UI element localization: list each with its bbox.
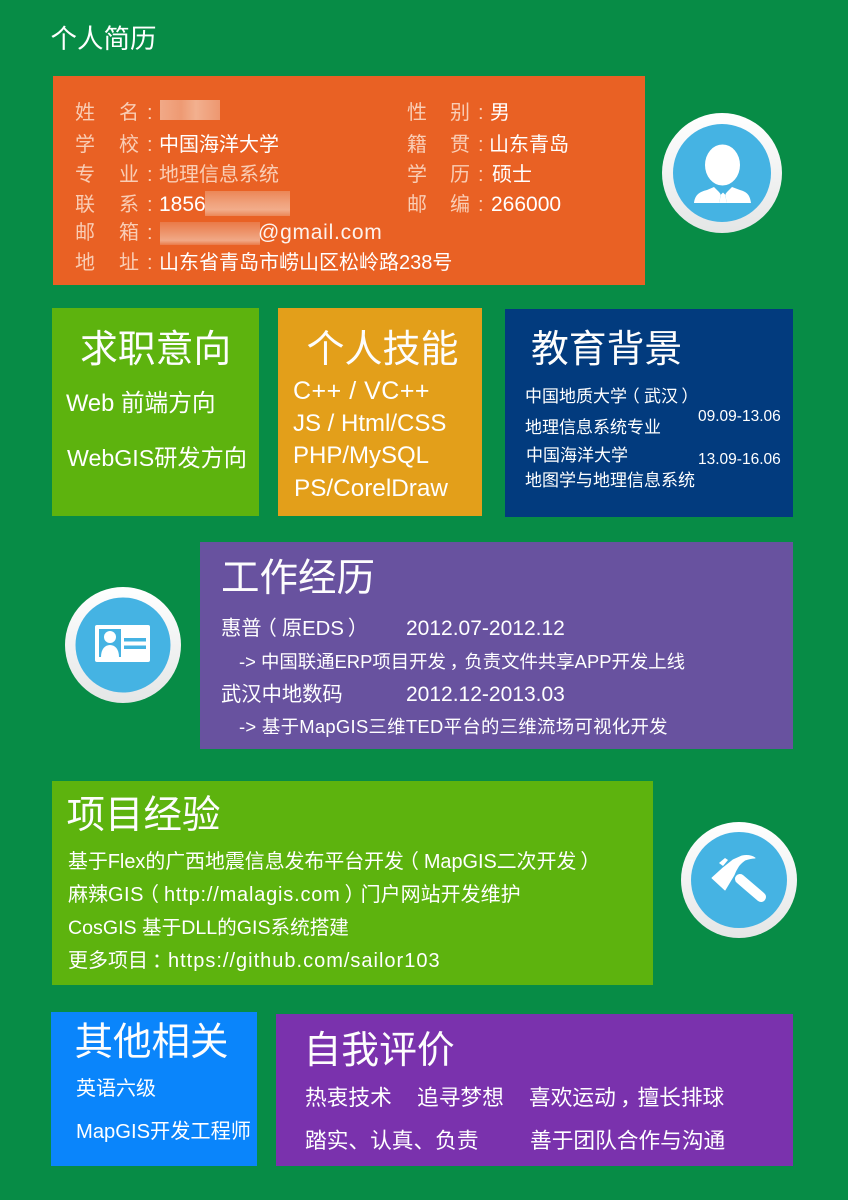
panel: skills <box>278 308 482 516</box>
text: second job detail: -> 基于MapGIS三维TED平台的三维流场可视化开发 <box>239 716 668 737</box>
panel: self assessment <box>276 1014 793 1166</box>
row: name and gender <box>75 100 510 124</box>
row: address: 地 <box>75 252 95 274</box>
text: project two: 麻辣GIS（http://malagis.com）门户网站开发维护 <box>68 884 521 906</box>
row: school and hometown: : <box>478 134 484 156</box>
row: school and hometown: 山东青岛 <box>489 134 569 156</box>
text: first job detail: -> 中国联通ERP项目开发，负责文件共享APP开发上线 <box>239 651 685 672</box>
row: name and gender: 名 <box>119 102 139 124</box>
text: second major: 地图学与地理信息系统 <box>525 471 695 490</box>
text: passion for technology: 热衷技术 <box>305 1085 392 1110</box>
row: name and gender: 姓 <box>75 102 95 124</box>
heading: 教育背景 <box>531 329 682 371</box>
text: C++: C++ / VC++ <box>293 377 430 405</box>
text: second dates: 13.09-16.06 <box>698 451 781 468</box>
row: major and degree <box>75 164 532 186</box>
row: school and hometown <box>75 134 569 156</box>
row: school and hometown: 校 <box>119 134 139 156</box>
text: second university: 中国海洋大学 <box>526 446 628 465</box>
icon: person badge <box>662 113 782 233</box>
row: school and hometown: 中国海洋大学 <box>159 134 279 156</box>
row: email: @gmail.com <box>258 221 383 244</box>
row: email: 邮 <box>75 222 95 244</box>
text: first period: 2012.07-2012.12 <box>406 617 565 640</box>
title: 个人简历 <box>50 24 156 54</box>
row: name and gender: : <box>147 102 153 124</box>
row: major and degree: 专 <box>75 164 95 186</box>
text: second employer: 武汉中地数码 <box>221 684 343 706</box>
row: phone and postcode: 系 <box>119 194 139 216</box>
text: PHP MySQL: PHP/MySQL <box>293 442 429 469</box>
heading: 其他相关 <box>74 1021 229 1064</box>
row: major and degree: : <box>147 164 153 186</box>
text: project link: 更多项目：https://github.com/sailor103 <box>68 950 441 972</box>
row: major and degree: 学 <box>407 164 427 186</box>
row: phone and postcode: 266000 <box>491 193 561 216</box>
heading: 项目经验 <box>66 794 221 837</box>
heading: 自我评价 <box>304 1030 455 1072</box>
panel: basic information <box>53 76 645 285</box>
text: first employer: 惠普（原EDS） <box>221 618 368 640</box>
row: phone and postcode: 邮 <box>407 194 427 216</box>
row: major and degree: : <box>478 164 484 186</box>
row: address: : <box>147 252 153 274</box>
row: major and degree: 业 <box>119 164 139 186</box>
row: major and degree: 地理信息系统 <box>159 164 279 186</box>
text: WebGIS direction: WebGIS研发方向 <box>67 445 247 471</box>
row: major and degree: 历 <box>450 164 470 186</box>
row: phone and postcode: 编 <box>450 194 470 216</box>
text: PS CorelDraw: PS/CorelDraw <box>294 475 448 502</box>
text: project one: 基于Flex的广西地震信息发布平台开发（MapGIS二次开发） <box>68 851 600 873</box>
text: english level: 英语六级 <box>76 1078 156 1100</box>
row: school and hometown: : <box>147 134 153 156</box>
row: name and gender: 别 <box>450 102 470 124</box>
heading: 工作经历 <box>221 557 375 600</box>
row: school and hometown: 贯 <box>450 134 470 156</box>
text: pursuing dreams: 追寻梦想 <box>417 1085 504 1110</box>
heading: 个人技能 <box>306 329 459 371</box>
icon: id card badge <box>65 587 181 703</box>
row: phone and postcode: 联 <box>75 194 95 216</box>
row: phone and postcode: : <box>147 194 153 216</box>
row: name and gender: 男 <box>490 102 510 124</box>
panel: job intention <box>52 308 259 516</box>
row: major and degree: 硕士 <box>492 164 532 186</box>
row: email <box>75 221 383 245</box>
panel: other <box>51 1012 257 1166</box>
panel: work experience <box>200 542 793 749</box>
row: name and gender: 性 <box>407 102 427 124</box>
text: second period: 2012.12-2013.03 <box>406 683 565 706</box>
row: email: : <box>147 222 153 244</box>
text: first major: 地理信息系统专业 <box>525 418 661 437</box>
heading: 求职意向 <box>80 329 231 371</box>
text: front-end direction: Web 前端方向 <box>66 391 216 417</box>
text: project three: CosGIS 基于DLL的GIS系统搭建 <box>68 917 349 939</box>
panel: education <box>505 309 793 517</box>
row: email: 箱 <box>119 222 139 244</box>
icon: hammer badge <box>681 822 797 938</box>
text: first dates: 09.09-13.06 <box>698 408 781 425</box>
row: phone and postcode: 1856 <box>159 193 206 216</box>
row: school and hometown: 学 <box>75 134 95 156</box>
text: certification: MapGIS开发工程师 <box>76 1121 251 1143</box>
row: phone and postcode: : <box>478 194 484 216</box>
row: phone and postcode <box>75 191 561 216</box>
text: diligent: 踏实、认真、负责 <box>305 1128 479 1153</box>
text: teamwork: 善于团队合作与沟通 <box>530 1128 725 1153</box>
text: JS HTML CSS: JS / Html/CSS <box>293 410 446 437</box>
text: sports: 喜欢运动，擅长排球 <box>529 1085 724 1110</box>
row: name and gender: : <box>478 102 484 124</box>
row: address: 址 <box>119 252 139 274</box>
panel: projects <box>52 781 653 985</box>
row: school and hometown: 籍 <box>407 134 427 156</box>
text: first university: 中国地质大学（武汉） <box>525 387 698 406</box>
row: address: 山东省青岛市崂山区松岭路238号 <box>159 252 452 274</box>
